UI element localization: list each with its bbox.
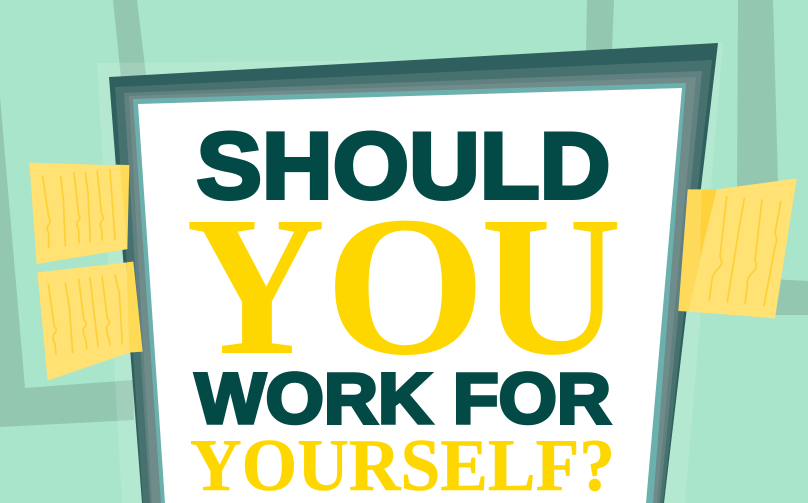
title line: YOU: O (325, 176, 486, 397)
title line: SHOULD: SHOULD (196, 113, 610, 218)
title line: WORK FOR: WORK FOR (195, 359, 611, 439)
title line: YOU: Y (186, 176, 325, 397)
title line: YOU: U (480, 176, 622, 397)
title (186, 113, 622, 503)
sticky note: top left (29, 163, 129, 264)
picture frame (109, 43, 718, 503)
sticky note: lower left (37, 262, 143, 381)
sticky note: right (678, 178, 797, 318)
light glow behind frame (97, 43, 723, 503)
title line: YOU (186, 176, 622, 397)
